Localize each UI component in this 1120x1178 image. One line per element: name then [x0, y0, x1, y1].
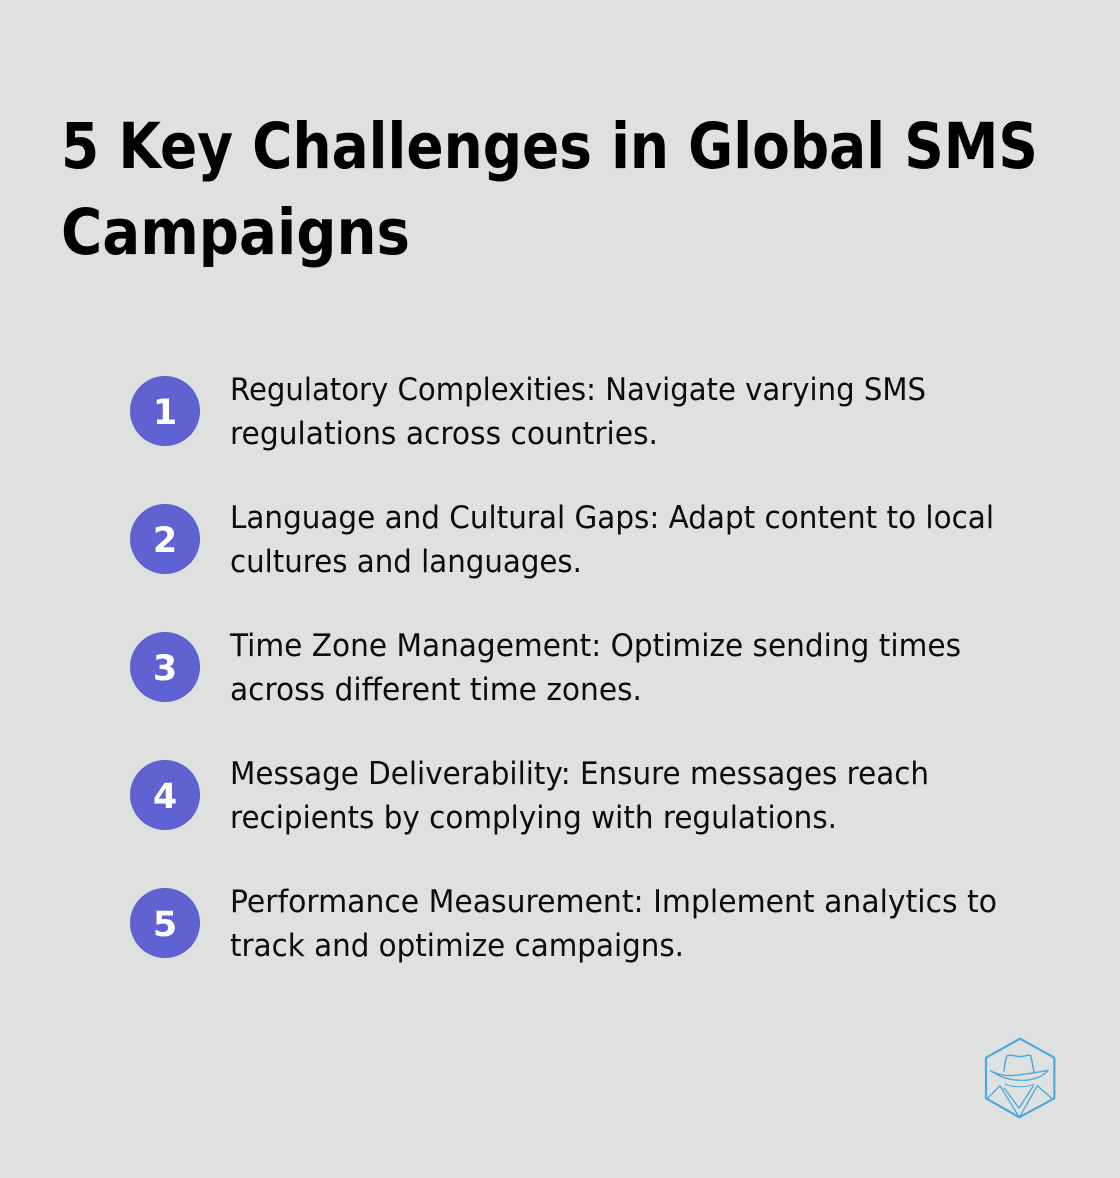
number badge 2 [130, 504, 200, 574]
number badge 4: 4 [153, 777, 177, 817]
item 3 text: Time Zone Management: Optimize sending times [229, 628, 961, 664]
item 1: regulatory complexities [130, 372, 926, 452]
item 5: performance measurement [130, 884, 997, 964]
number badge 3: 3 [153, 649, 177, 689]
item 2 text: Language and Cultural Gaps: Adapt content to local [230, 500, 994, 536]
item 2 text: cultures and languages. [230, 544, 582, 580]
icon: hexagon spy logo [986, 1039, 1054, 1117]
title [61, 110, 1038, 269]
item 1 text: regulations across countries. [230, 416, 658, 452]
item 1 text [230, 372, 926, 452]
item 1 text: Regulatory Complexities: Navigate varying SMS [230, 372, 926, 408]
item 4 text [230, 756, 929, 836]
item 2 text [230, 500, 994, 580]
item 3 text [229, 628, 961, 708]
number badge 5: 5 [153, 905, 177, 945]
item 3 text: across different time zones. [230, 672, 642, 708]
number badge 4 [130, 760, 200, 830]
number badge 2: 2 [153, 521, 177, 561]
number badge 5 [130, 888, 200, 958]
item 5 text: track and optimize campaigns. [230, 928, 684, 964]
item 5 text [230, 884, 997, 964]
item 4 text: Message Deliverability: Ensure messages reach [230, 756, 929, 792]
item 3: time zone management [130, 628, 961, 708]
number badge 1: 1 [153, 393, 177, 433]
challenge list [130, 372, 997, 964]
title: Campaigns [61, 196, 410, 269]
number badge 1 [130, 376, 200, 446]
item 5 text: Performance Measurement: Implement analytics to [230, 884, 997, 920]
number badge 3 [130, 632, 200, 702]
item 2: language and cultural gaps [130, 500, 994, 580]
item 4: message deliverability [130, 756, 929, 836]
item 4 text: recipients by complying with regulations. [230, 800, 837, 836]
